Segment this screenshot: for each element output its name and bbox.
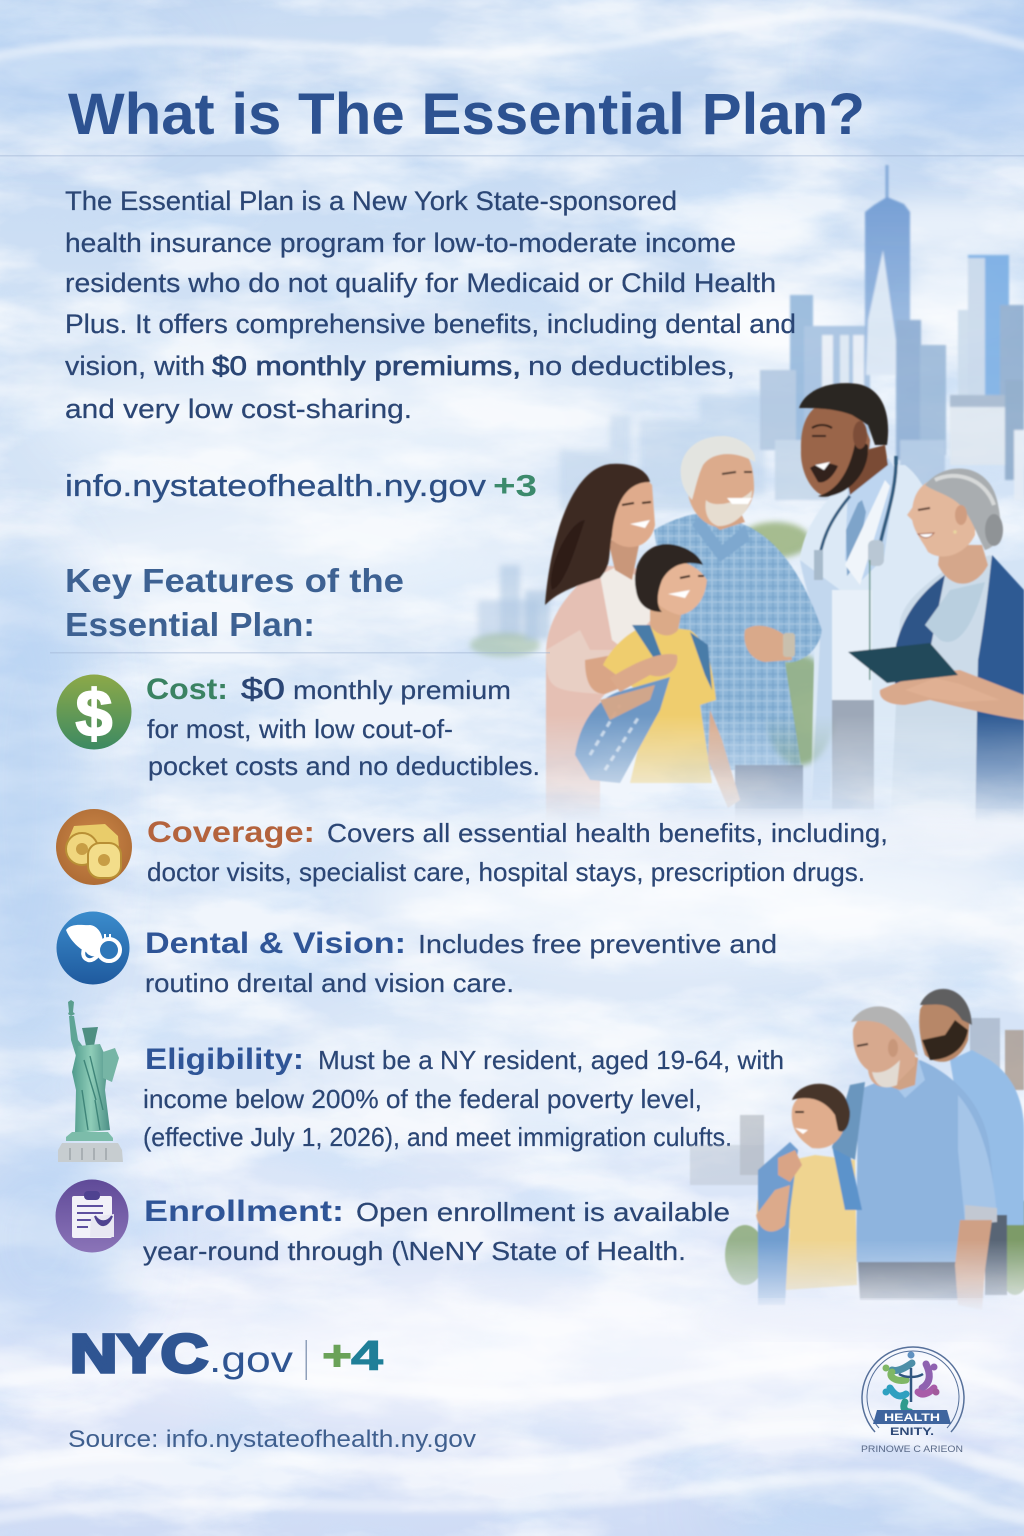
background: city and trees [690,1018,1024,1295]
intro paragraph: residents who do not qualify for Medicaid or Child Health [65,268,776,298]
eligibility text [143,1043,784,1152]
icon: dollar sign [56,674,132,750]
cost text: monthly premium [293,675,511,705]
illustration: grandfather with child and adult [690,989,1024,1310]
feature: eligibility [58,1000,784,1162]
eligibility text: Eligibility: [145,1043,304,1076]
logo: NYC.gov with citation count: NYC [70,1324,208,1384]
title: What is The Essential Plan? [68,82,865,147]
intro paragraph: health insurance program for low-to-moderate income [65,228,736,258]
cost text [146,673,540,781]
person: grandfather [851,1006,997,1310]
logo: NYC.gov with citation count: .gov [209,1339,294,1380]
cost text: pocket costs and no deductibles. [148,751,540,781]
cost text: for most, with low cout-of- [147,714,453,744]
feature: cost [56,673,540,781]
icon: statue of liberty [58,1000,123,1162]
coverage text: Covers all essential health benefits, including, [327,818,888,848]
feature: coverage [56,809,888,887]
eligibility text: income below 200% of the federal poverty level, [143,1084,702,1114]
cost text: $0 [241,673,285,706]
person: older man in plaid shirt [654,436,822,825]
person: child with backpack [575,544,740,808]
coverage text: doctor visits, specialist care, hospital stays, prescription drugs. [147,857,865,887]
section heading: key features: Key Features of the [65,562,404,599]
enrollment text: Open enrollment is available [356,1197,730,1227]
intro paragraph: Plus. It offers comprehensive benefits, including dental and [65,309,796,339]
dental and vision text: Includes free preventive and [418,929,777,959]
clouds behind skyline [700,199,1024,366]
coverage text: Coverage: [147,816,315,849]
intro paragraph: and very low cost-sharing. [65,394,412,424]
enrollment text: year-round through (\NeNY State of Health. [143,1236,686,1266]
icon: gold coverage emblem [56,809,132,885]
logo: NYC.gov with citation count [70,1324,384,1384]
intro paragraph [65,186,796,424]
enrollment text: Enrollment: [144,1195,344,1228]
icon: dollar sign: $ [76,676,112,750]
cloud fade under second group [690,1302,1024,1338]
logo: health entity badge: HEALTH [884,1412,940,1424]
eligibility text: (effective July 1, 2026), and meet immigration culufts. [143,1122,732,1152]
intro paragraph: $0 monthly premiums, [212,351,521,381]
cost text: Cost: [146,673,228,706]
logo: NYC.gov with citation count: + [322,1332,352,1379]
section heading: key features: Essential Plan: [65,606,315,643]
feature: dental and vision [56,912,777,998]
intro paragraph: vision, with [65,351,205,381]
illustration: distant skyline and trees left of family [470,522,835,765]
source link with citation count: info.nystateofhealth.ny.gov [65,468,487,503]
icon: tooth and glasses [56,912,130,984]
icon: clipboard form [56,1180,128,1252]
section heading: key features [65,562,404,643]
person: older woman with clipboard [848,468,1024,830]
intro paragraph: The Essential Plan is a New York State-sponsored [65,186,677,216]
logo: health entity badge: ENITY. [890,1426,934,1438]
dental and vision text: Dental & Vision: [145,927,406,960]
person: mother [544,462,656,811]
coverage text [147,816,888,887]
dental and vision text [145,927,777,998]
dental and vision text: routino dreıtal and vision care. [145,968,514,998]
person: child in yellow shirt [756,1082,865,1305]
logo: NYC.gov with citation count: 4 [351,1332,384,1379]
cloud fade under family [490,813,1024,857]
feature: enrollment [56,1180,730,1266]
enrollment text [143,1195,730,1266]
person: adult man behind [919,989,1024,1295]
logo: health entity badge [861,1347,964,1455]
intro paragraph: no deductibles, [528,351,735,381]
source link with citation count: +3 [493,468,537,503]
person: doctor [798,382,931,808]
illustration: New York City skyline [560,165,1024,530]
logo: health entity badge: PRINOWE C ARIEON [861,1444,963,1455]
illustration: family with doctor [545,383,1024,830]
source line: Source: info.nystateofhealth.ny.gov [68,1426,476,1453]
eligibility text: Must be a NY resident, aged 19-64, with [318,1045,784,1075]
